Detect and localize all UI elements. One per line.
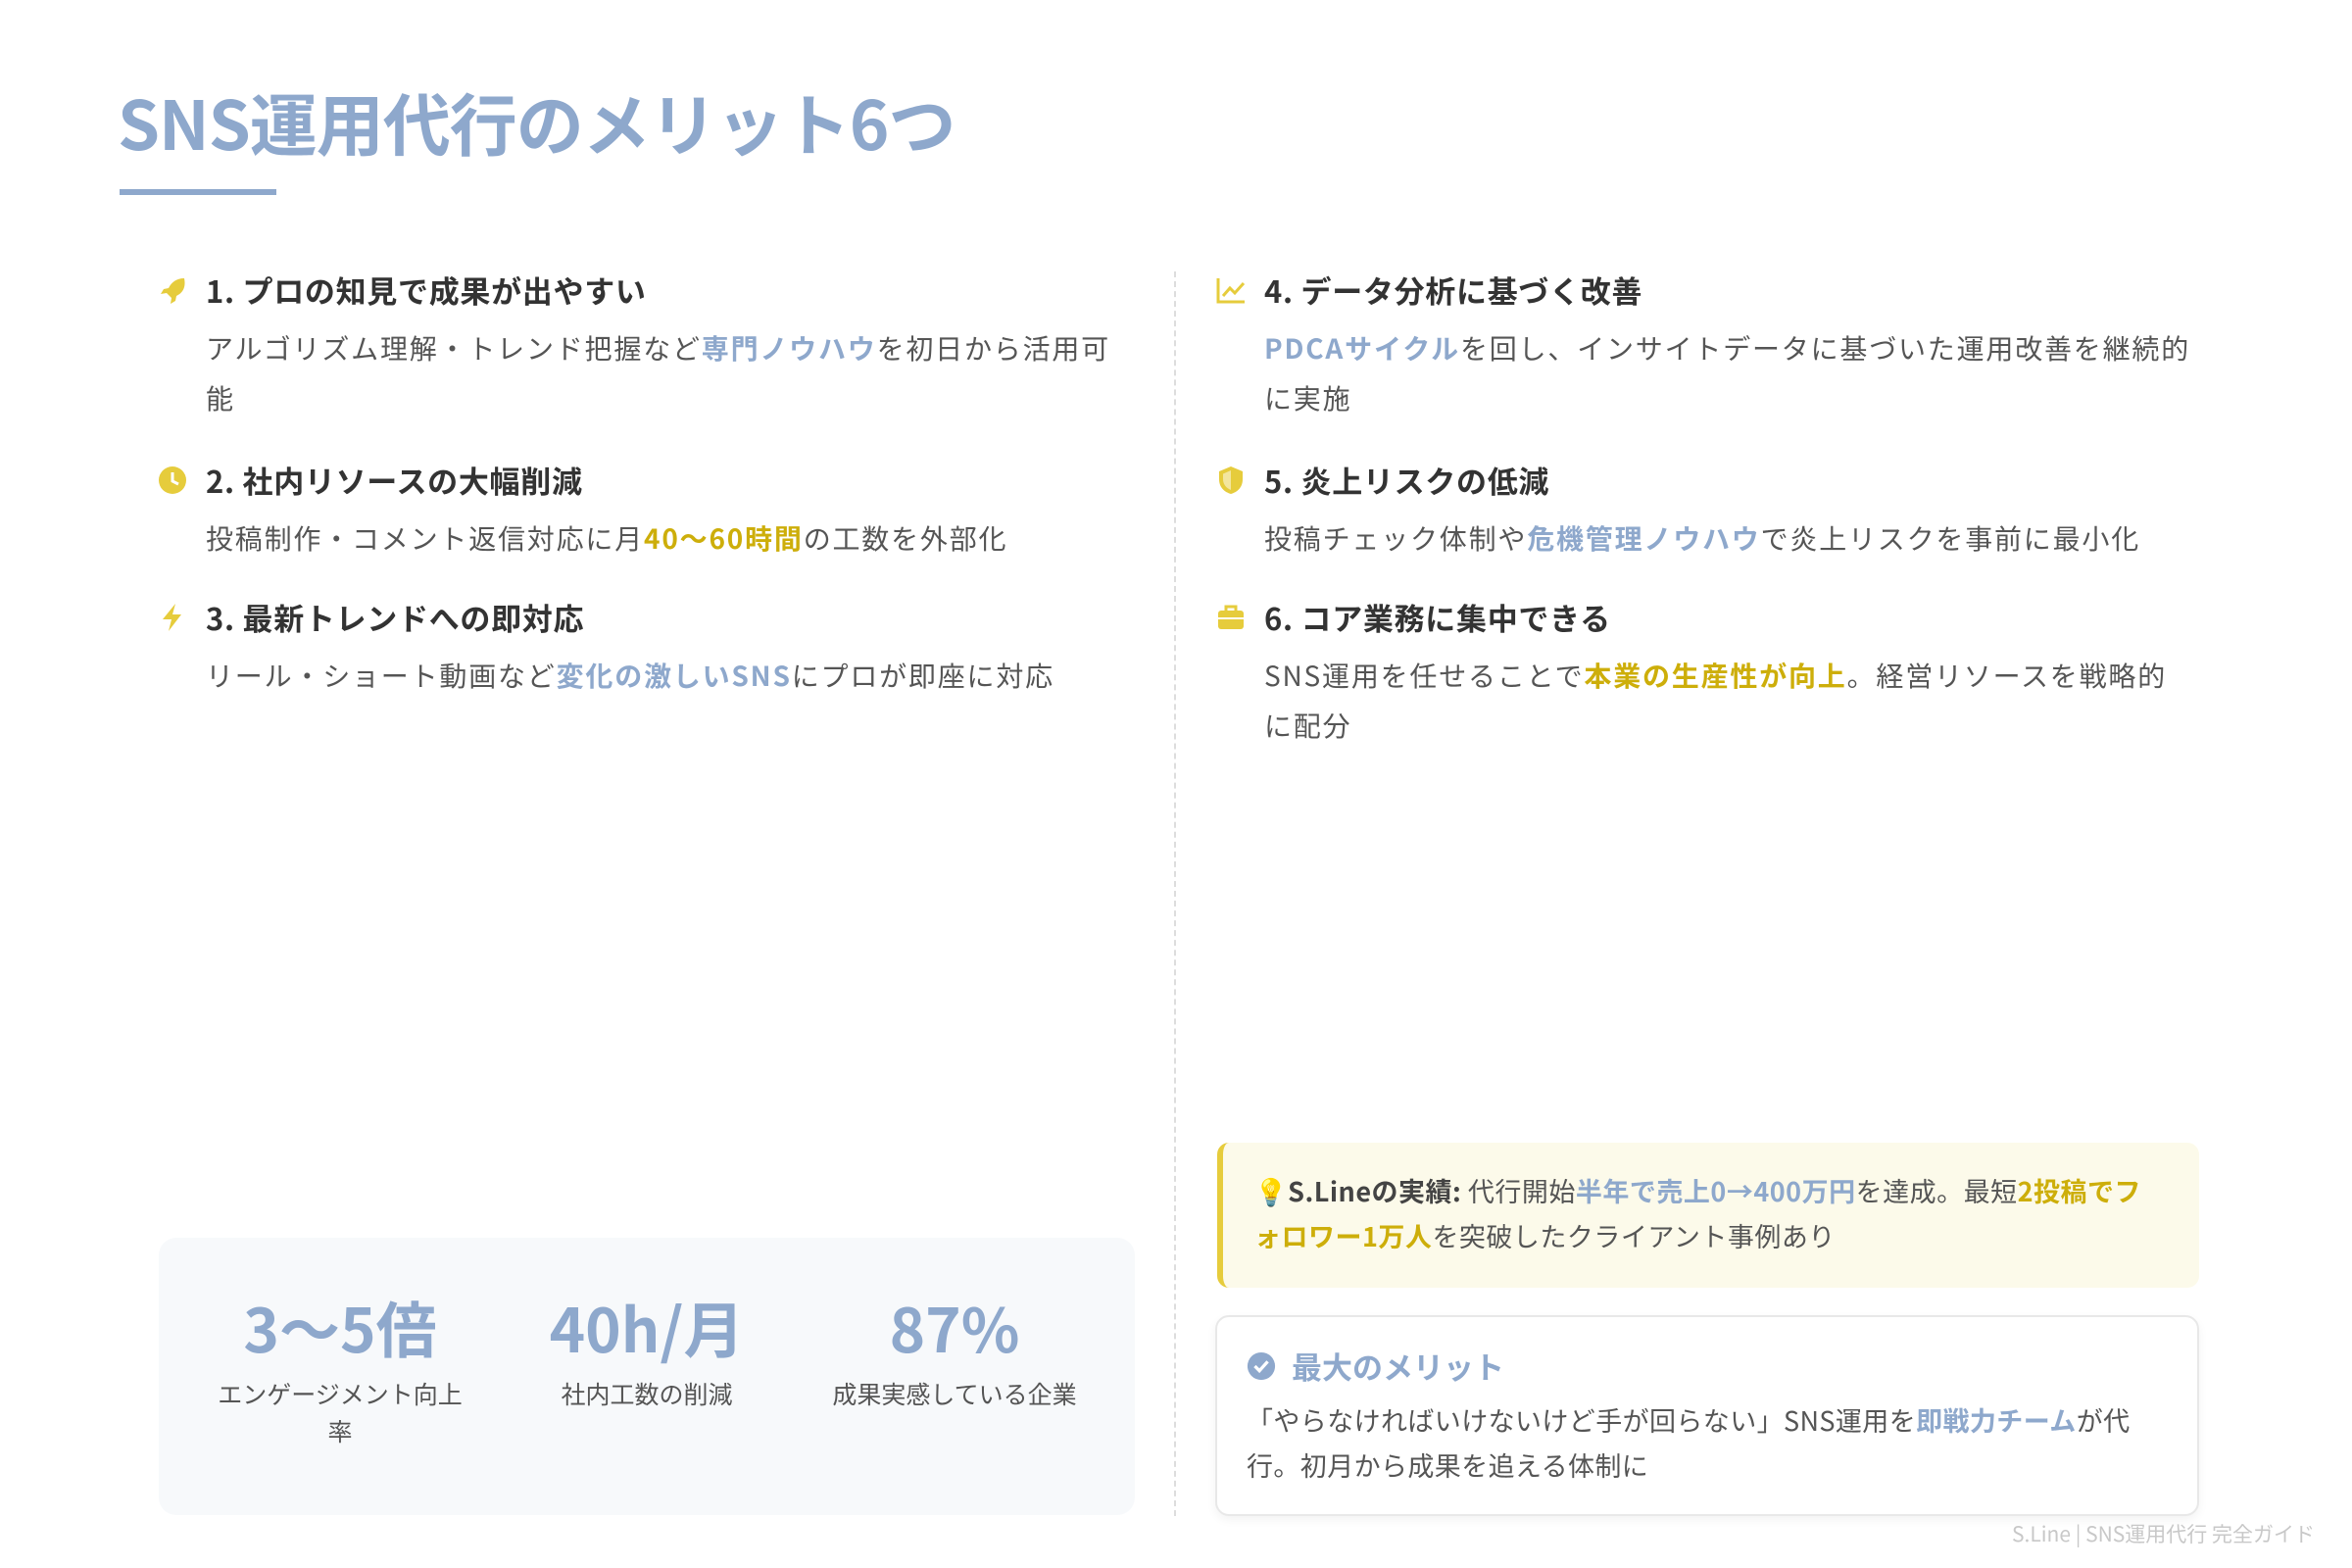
divider	[1174, 271, 1176, 1516]
item 6: SNS運用を任せることで本業の生産性が向上。経営リソースを戦略的	[1264, 656, 2167, 695]
stat: engagement: 3〜5倍	[243, 1282, 437, 1370]
icon: rocket	[161, 278, 184, 304]
stat: hours: 社内工数の削減	[561, 1376, 733, 1411]
item 2	[159, 458, 1007, 558]
item 1: アルゴリズム理解・トレンド把握など専門ノウハウを初日から活用可	[206, 328, 1110, 368]
icon: chart	[1217, 278, 1245, 304]
stat: hours	[550, 1282, 744, 1411]
item 1	[161, 268, 1110, 417]
item 3	[163, 595, 1054, 695]
item 3: リール・ショート動画など変化の激しいSNSにプロが即座に対応	[206, 656, 1054, 695]
callout: S.Line results: 💡S.Lineの実績: 代行開始半年で売上0→400万円を達成。最短2投稿でフ	[1254, 1171, 2141, 1209]
stat: engagement: エンゲージメント向上	[218, 1376, 463, 1411]
card: biggest merit	[1215, 1315, 2199, 1516]
card: biggest merit: 行。初月から成果を追える体制に	[1247, 1446, 1648, 1484]
item 2: 2. 社内リソースの大幅削減	[206, 458, 583, 502]
item 4: PDCAサイクルを回し、インサイトデータに基づいた運用改善を継続的	[1264, 328, 2190, 368]
item 6: に配分	[1264, 706, 1351, 745]
stat: percent	[832, 1282, 1077, 1411]
item 4: に実施	[1264, 378, 1351, 417]
item 5	[1219, 458, 2140, 558]
item 4: 4. データ分析に基づく改善	[1264, 268, 1642, 312]
stat: percent: 成果実感している企業	[832, 1376, 1077, 1411]
item 4	[1217, 268, 2190, 417]
item 5: 5. 炎上リスクの低減	[1264, 458, 1549, 502]
stat: hours: 40h/月	[550, 1282, 744, 1370]
item 2: 投稿制作・コメント返信対応に月40〜60時間の工数を外部化	[206, 518, 1007, 558]
stat: engagement	[218, 1282, 463, 1448]
stats panel	[159, 1238, 1135, 1515]
item 3: 3. 最新トレンドへの即対応	[206, 595, 584, 639]
callout: S.Line results	[1217, 1143, 2199, 1288]
callout: S.Line results: ォロワー1万人を突破したクライアント事例あり	[1254, 1216, 1836, 1254]
item 6	[1218, 595, 2167, 745]
item 1: 能	[206, 378, 235, 417]
title: SNS運用代行のメリット6つ	[118, 72, 956, 170]
card: biggest merit: 最大のメリット	[1292, 1344, 1504, 1388]
footer: S.Line | SNS運用代行 完全ガイド	[2012, 1519, 2315, 1548]
stat: engagement: 率	[327, 1413, 353, 1448]
item 5: 投稿チェック体制や危機管理ノウハウで炎上リスクを事前に最小化	[1264, 518, 2140, 558]
icon: check	[1247, 1352, 1276, 1380]
stat: percent: 87%	[890, 1282, 1019, 1370]
icon: clock	[159, 466, 186, 494]
item 6: 6. コア業務に集中できる	[1264, 595, 1611, 639]
card: biggest merit: 「やらなければいけないけど手が回らない」SNS運用を即戦力チームが代	[1247, 1400, 2131, 1439]
icon: shield	[1219, 466, 1243, 494]
icon: bolt	[163, 604, 181, 631]
item 1: 1. プロの知見で成果が出やすい	[206, 268, 647, 312]
icon: briefcase	[1218, 606, 1244, 629]
